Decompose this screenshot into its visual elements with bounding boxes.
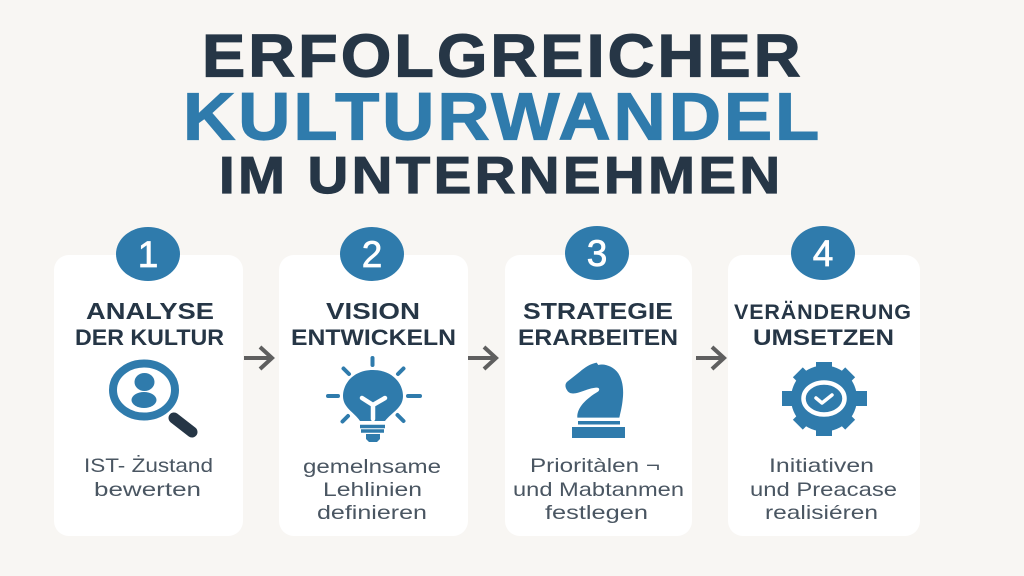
arrow 3 xyxy=(696,347,724,369)
heading: Veränderung umsetzen: VERÄNDERUNG xyxy=(734,300,911,324)
heading: Strategie erarbeiten xyxy=(518,298,678,350)
number badge 4: 4 xyxy=(813,233,833,274)
number badge 3: 3 xyxy=(587,233,607,274)
heading: Strategie erarbeiten: ERARBEITEN xyxy=(518,325,678,350)
heading: Vision entwickeln: ENTWICKELN xyxy=(291,325,456,350)
text: Prioritäten und Maßnahmen festlegen: Prioritàlen ¬ xyxy=(530,455,660,477)
text: Ist-Zustand bewerten: IST- Żustand xyxy=(84,454,213,477)
heading: Vision entwickeln xyxy=(291,298,456,350)
text: Initiativen und Prozesse realisieren xyxy=(750,455,897,524)
heading: Veränderung umsetzen: UMSETZEN xyxy=(753,325,894,350)
title: KULTURWANDEL xyxy=(183,79,822,154)
number badge 2 xyxy=(340,227,404,281)
heading: Vision entwickeln: VISION xyxy=(326,298,420,324)
text: Initiativen und Prozesse realisieren: und Preacase xyxy=(750,479,897,501)
text: Initiativen und Prozesse realisieren: realisiéren xyxy=(765,502,878,524)
panel: step 1 xyxy=(54,227,243,536)
panel: step 3 xyxy=(505,226,692,536)
icon: magnifier with person xyxy=(113,364,192,432)
text: Prioritäten und Maßnahmen festlegen: und Mabtanmen xyxy=(513,479,684,501)
icon: gear with check xyxy=(782,362,867,436)
text: gemeinsame Leitlinien definieren: definieren xyxy=(317,502,427,524)
text: Prioritäten und Maßnahmen festlegen xyxy=(513,455,684,524)
arrow 2 xyxy=(468,347,496,369)
heading: Analyse der Kultur xyxy=(75,298,224,350)
heading: Strategie erarbeiten: STRATEGIE xyxy=(523,298,673,324)
number badge 3 xyxy=(565,226,629,280)
heading: Analyse der Kultur: ANALYSE xyxy=(86,298,214,324)
text: Ist-Zustand bewerten: bewerten xyxy=(94,479,201,501)
text: gemeinsame Leitlinien definieren: Lehlinien xyxy=(323,479,422,501)
text: gemeinsame Leitlinien definieren xyxy=(303,456,441,524)
icon: chess knight xyxy=(565,363,625,438)
arrow 1 xyxy=(244,347,272,369)
title: IM UNTERNEHMEN xyxy=(219,147,784,205)
heading: Veränderung umsetzen xyxy=(734,300,911,350)
text: Ist-Zustand bewerten xyxy=(84,454,213,501)
title: ERFOLGREICHER xyxy=(202,23,804,90)
number badge 1 xyxy=(116,227,180,281)
number badge 4 xyxy=(791,226,855,280)
icon: light bulb xyxy=(328,358,420,442)
title xyxy=(183,23,822,205)
number badge 2: 2 xyxy=(362,234,382,275)
heading: Analyse der Kultur: DER KULTUR xyxy=(75,325,224,350)
text: gemeinsame Leitlinien definieren: gemelnsame xyxy=(303,456,441,478)
text: Initiativen und Prozesse realisieren: Initiativen xyxy=(769,455,874,477)
panel: step 4 xyxy=(728,226,920,536)
text: Prioritäten und Maßnahmen festlegen: festlegen xyxy=(545,502,648,524)
number badge 1: 1 xyxy=(138,234,158,275)
panel: step 2 xyxy=(279,227,468,536)
